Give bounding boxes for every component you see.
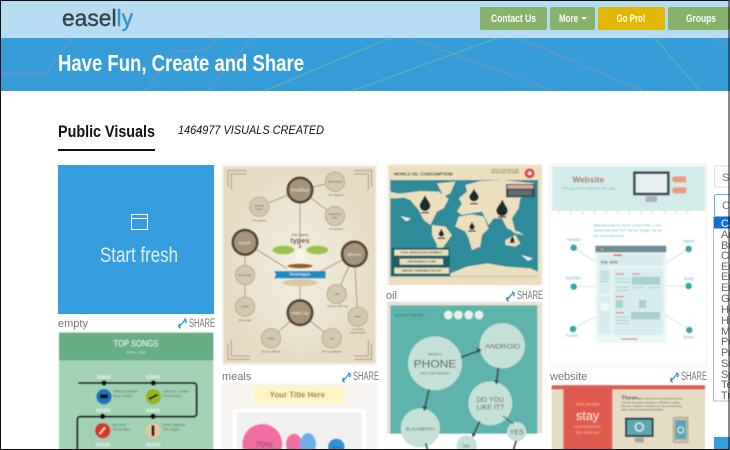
panel: meals infographic: 40 mg caffeine	[261, 349, 281, 353]
panel: website infographic: Body	[684, 276, 695, 281]
data boxes: 1000 BARRELS X 1000	[407, 260, 436, 264]
node: lunch	[231, 229, 259, 256]
panel: start fresh: Start fresh	[100, 244, 178, 267]
world map	[390, 180, 538, 277]
panel: meals infographic: 78 calories	[252, 218, 267, 222]
icon: monitor	[625, 418, 654, 442]
panel: how people stay connected infographic: days everyone is connected to the	[637, 397, 683, 401]
button: Contact Us	[480, 7, 547, 30]
panel: top songs infographic: The Eagles	[163, 427, 180, 431]
node: lunch: lunch	[239, 240, 251, 246]
panel: meals infographic: electrolytes	[350, 331, 366, 335]
panel: meals infographic: grapefruit	[329, 212, 341, 216]
panel: meals infographic: lemonade	[238, 273, 252, 277]
panel: mobile phone flowchart: PHONE	[414, 358, 456, 370]
panel: mobile phone flowchart: YES	[510, 429, 524, 436]
tab heading: Public Visuals	[58, 122, 155, 151]
panel: your title here infographic: 30%	[332, 445, 341, 450]
panel: top songs infographic: 1947s - 2010	[126, 351, 146, 355]
panel: website infographic: Name	[683, 239, 695, 244]
center title: of	[298, 245, 303, 249]
panel: start fresh	[58, 165, 214, 314]
caption: website: SHARE	[681, 371, 707, 383]
panel: website infographic: Footer	[566, 333, 579, 338]
panel: meals infographic: 75 calories	[329, 227, 344, 231]
panel: mobile phone flowchart: WHICH	[428, 352, 442, 357]
search box	[714, 166, 730, 187]
center title: types	[290, 236, 310, 245]
panel: top songs infographic: Johnny B. Goode	[163, 390, 189, 394]
caption: oil: SHARE	[517, 290, 543, 302]
node: dinner: dinner	[347, 252, 362, 258]
banner heading: Have Fun, Create and Share	[58, 50, 304, 76]
panel: how people stay connected infographic: how people	[576, 401, 600, 406]
panel: how people stay connected infographic: These	[621, 396, 638, 402]
panel: website infographic: Header	[567, 237, 582, 242]
panel: website infographic: Website	[572, 175, 605, 185]
top navigation bar	[0, 0, 730, 38]
button: Go Pro: Go Pro!	[616, 13, 646, 25]
panel: top songs infographic: Hotel California	[163, 423, 186, 427]
button: More	[550, 7, 595, 30]
panel: mobile phone flowchart: BLACKBERRY	[406, 426, 435, 431]
panel: how people stay connected infographic: internet through computers. Whether mobile	[621, 400, 680, 404]
center title	[290, 232, 310, 249]
data boxes: TOTAL WORLD 84,847 BARRELS	[400, 251, 442, 255]
panel: oil consumption infographic: THE BIGGEST OIL USERS	[491, 173, 520, 175]
button: More: More	[559, 13, 578, 25]
panel: meals infographic: juice	[331, 216, 338, 220]
panel: meals infographic: milk	[334, 292, 340, 296]
data boxes	[392, 248, 450, 276]
center title: the many	[292, 232, 308, 237]
panel: website infographic	[550, 164, 707, 367]
panel: meals infographic: apple juice	[328, 180, 342, 184]
panel: top songs infographic	[59, 333, 213, 450]
panel: mobile phone flowchart: DO YOU HAVE?	[420, 371, 451, 376]
panel: your title here infographic: Your Title Here	[270, 390, 326, 399]
panel: meals infographic: water	[354, 315, 361, 319]
panel: mobile phone flowchart: DO YOU	[477, 397, 504, 404]
banner ribbon: beverages: beverages	[290, 271, 310, 276]
panel: website infographic: Notes	[683, 335, 695, 340]
panel: website infographic: The good the bad and the ugly	[561, 186, 615, 191]
panel: meals infographic: juice	[255, 207, 263, 211]
node: dinner	[341, 240, 368, 268]
banner	[0, 38, 730, 91]
panel: meals infographic: coffee	[267, 336, 275, 340]
tab heading: Public Visuals: Public Visuals	[58, 122, 155, 141]
panel: mobile phone flowchart: ANDROID	[485, 343, 520, 350]
arrows	[425, 351, 516, 450]
panel: top songs infographic: White Christmas	[113, 390, 138, 394]
oil drops	[420, 188, 514, 242]
panel: mobile phone flowchart	[387, 302, 542, 450]
blue action button	[714, 437, 730, 450]
panel: meals infographic	[222, 165, 377, 366]
node: breakfast: breakfast	[291, 188, 310, 193]
caption: oil: oil	[386, 290, 397, 302]
panel: oil consumption infographic: WORLD OIL CONSUMPTION	[394, 171, 453, 177]
panel: meals infographic: orange	[255, 204, 264, 208]
caption: meals: SHARE	[353, 371, 379, 383]
category select box	[714, 194, 730, 216]
panel: how people stay connected infographic: phones, tablets or laptops you are consuming	[621, 404, 682, 408]
panel: top songs infographic: Chuck Berry	[163, 394, 181, 398]
search box: S	[722, 172, 729, 184]
caption: meals: meals	[222, 371, 252, 383]
button: Groups	[668, 7, 730, 30]
icon: window	[132, 214, 148, 230]
panel: top songs infographic: Hey Jude	[112, 423, 126, 427]
panel: meals infographic: 30 mg caffeine	[322, 349, 342, 353]
panel: meals infographic: tea	[330, 336, 334, 340]
data boxes: AMOUNT CONSUMED PER DAY	[402, 269, 442, 273]
caption: oil	[386, 290, 543, 302]
node: wake up	[286, 299, 314, 326]
caption: empty: empty	[58, 318, 88, 330]
node: wake up: wake up	[291, 310, 309, 315]
caption: website	[549, 371, 707, 383]
node: breakfast	[286, 176, 314, 204]
panel: oil consumption infographic: WHICH COUNTRIES ARE	[491, 169, 519, 172]
button: Groups: Groups	[686, 13, 716, 25]
panel: website infographic: JavaScript and PHP but the design can be	[594, 228, 662, 232]
button: Go Pro	[598, 7, 665, 30]
panel: meals infographic: recycled	[352, 327, 364, 331]
panel: mobile phone flowchart: LIKE IT?	[477, 405, 504, 412]
category select box: C	[722, 200, 730, 212]
leaf decorations	[272, 246, 328, 254]
browser mockup: my site	[601, 259, 618, 265]
panel: website infographic: the most important.	[594, 234, 625, 238]
panel: how people stay connected infographic	[552, 385, 705, 450]
panel: mobile phone flowchart: NO	[463, 443, 471, 448]
panel: meals infographic: sprite	[241, 305, 249, 309]
panel: top songs infographic: Bing Crosby	[113, 394, 132, 398]
panel: mobile phone flowchart: MOBILE PHONE?	[395, 313, 425, 317]
panel: website infographic: Sidebar	[566, 275, 581, 280]
category dropdown list	[714, 217, 730, 402]
icon: phone	[673, 417, 688, 443]
banner ribbon: beverages	[274, 271, 326, 278]
caption: empty	[58, 318, 215, 330]
panel: oil consumption infographic	[387, 164, 542, 286]
panel: how people stay connected infographic: connected to	[574, 424, 601, 429]
caption: website: website	[549, 371, 587, 383]
button: Contact Us: Contact Us	[491, 13, 536, 25]
panel: top songs infographic: TOP SONGS	[113, 339, 158, 349]
caption: empty: SHARE	[189, 318, 215, 330]
panel: website infographic: Websites can be made using HTML, CSS,	[594, 223, 662, 227]
panel: meals infographic: calcium 296 mg	[327, 304, 348, 308]
panel: meals infographic: 16g sugar	[238, 318, 252, 322]
panel: top songs infographic: The Beatles	[112, 427, 130, 431]
panel: your title here infographic	[221, 383, 377, 450]
logo: easelly	[62, 5, 133, 31]
panel: how people stay connected infographic: data internet bandwidth globally.	[621, 408, 664, 412]
panel: how people stay connected infographic: stay	[576, 409, 600, 423]
panel: meals infographic: 87 calories	[329, 193, 344, 197]
panel: how people stay connected infographic: the internet	[576, 430, 600, 435]
browser mockup	[595, 246, 666, 343]
visuals counter: 1464977 VISUALS CREATED	[178, 123, 324, 137]
caption: meals	[222, 371, 379, 383]
panel: your title here infographic: 70%	[255, 440, 273, 450]
